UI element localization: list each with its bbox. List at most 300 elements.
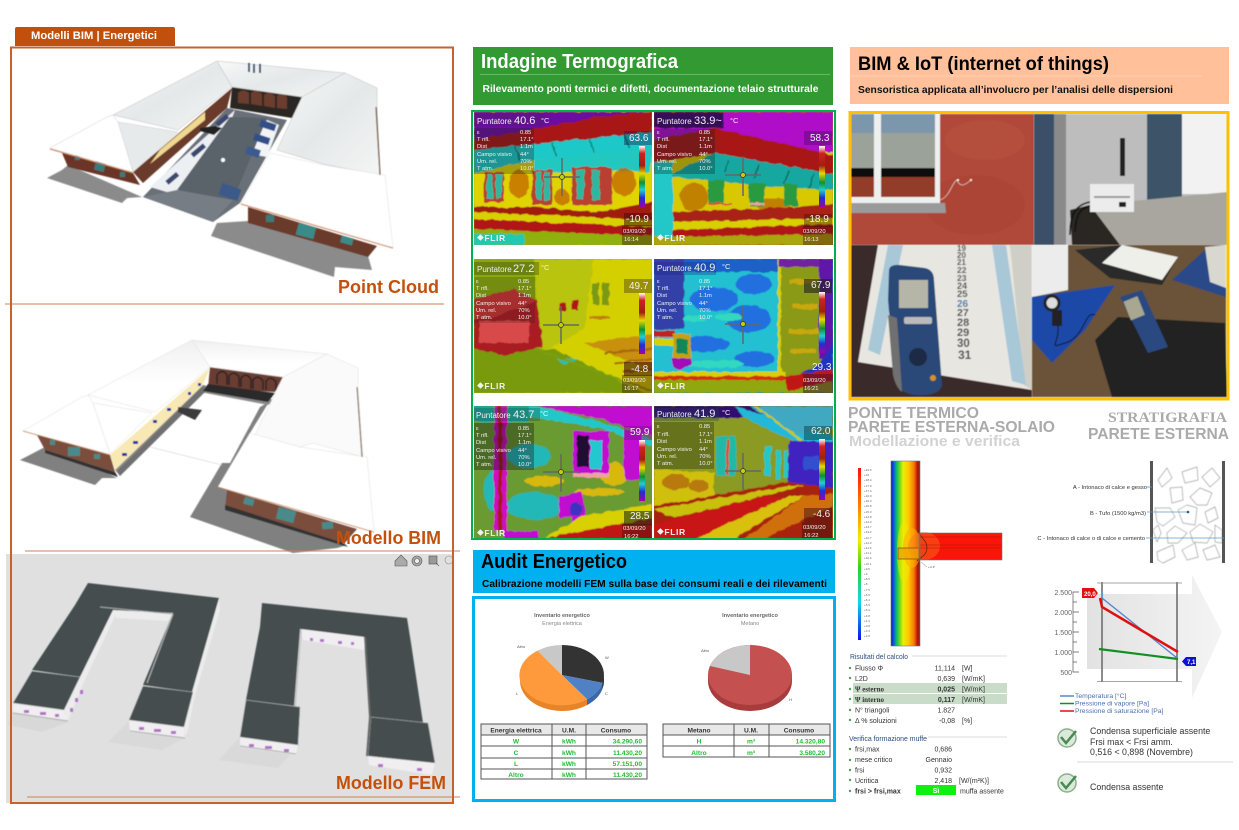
thermal image 5: T rifl. — [476, 433, 489, 439]
thermal image 3: 0.85 — [518, 279, 529, 285]
chart: thermal bridge model: +U.P. — [928, 565, 935, 569]
legend — [1060, 692, 1164, 715]
chart: thermal bridge model: +5.4 — [864, 608, 870, 612]
legend: Pressione di saturazione [Pa] — [1075, 708, 1164, 715]
table: methane: U.M. — [744, 728, 758, 734]
thermal image 1: 0.85 — [520, 130, 531, 136]
thermal image 6: 03/09/20 — [803, 525, 826, 531]
panel: IoT sensor photos — [850, 112, 1228, 399]
thermal image 5: 44° — [518, 448, 527, 454]
chart: thermal bridge model: +18.4 — [864, 478, 872, 482]
chart: thermal bridge model: +16.3 — [864, 499, 872, 503]
thermal image 5: 28.5 — [630, 511, 650, 522]
thermal image 5: ε — [476, 426, 479, 432]
thermal image 4: T rifl. — [657, 286, 670, 292]
thermal image 4: Dist — [657, 293, 667, 299]
thermal image 2: Puntatore — [657, 117, 692, 126]
chart: thermal bridge model: +10.6 — [864, 556, 872, 560]
thermal image 2: 16:13 — [804, 237, 819, 243]
thermal image 5: 59.9 — [630, 427, 650, 438]
thermal image 5: T atm. — [476, 462, 493, 468]
thermal image 6: Campo visivo — [657, 447, 692, 453]
heading: Indagine Termografica: Rilevamento ponti termici e difetti, documentazione telaio strutturale — [482, 83, 819, 95]
photo: meter on calendar: 30 — [957, 338, 970, 350]
chart: thermal bridge model: +14.3 — [864, 520, 872, 524]
photo: sensor on red wall — [851, 114, 1034, 245]
chart: thermal bridge model: +11.1 — [864, 551, 872, 555]
label: Modello BIM: Modello BIM — [336, 528, 441, 548]
panel: calculation results: frsi > frsi,max — [855, 788, 901, 796]
thermal image 3: 10.0° — [518, 315, 532, 321]
heading: Stratigrafia: PARETE ESTERNA — [1088, 426, 1229, 443]
thermal image 4: Campo visivo — [657, 301, 692, 307]
chart: thermal bridge model: +16.9 — [864, 494, 872, 498]
thermal image 6: Puntatore — [657, 410, 692, 419]
thermal image 3: Um. rel. — [476, 308, 497, 314]
thermal image 2: -18.9 — [806, 214, 829, 225]
chart: electricity pie: Energia elettrica — [542, 621, 583, 627]
table: methane: m³ — [747, 738, 756, 746]
table: electricity: 34.290,60 — [613, 738, 642, 746]
heading: Audit Energetico: Calibrazione modelli FEM sulla base dei consumi reali e dei rilevamenti — [482, 578, 827, 590]
chart: thermal bridge model: +13.2 — [864, 530, 872, 534]
panel: calculation results: 0,117 — [938, 697, 955, 704]
thermal image 2: ε — [657, 130, 660, 136]
thermal image 5: Puntatore — [476, 411, 511, 420]
thermal image 6: 70% — [699, 454, 711, 460]
table: electricity: 11.430,20 — [613, 750, 642, 757]
thermal image 1: 40.6 — [514, 115, 535, 127]
thermal image 1: Dist — [477, 144, 487, 150]
chart: methane pie: H — [789, 697, 792, 702]
thermal image 3: 44° — [518, 301, 527, 307]
panel: calculation results: Ψ esterno — [855, 686, 884, 694]
chart: methane pie: Altro — [701, 648, 710, 653]
thermal image 6: Um. rel. — [657, 454, 678, 460]
thermal image 1: T atm. — [477, 166, 494, 172]
marker: 20.0 — [1082, 588, 1098, 598]
thermal image 6: 44° — [699, 447, 708, 453]
chart: thermal bridge model: +4.8 — [864, 614, 870, 618]
table: electricity: 57.151,00 — [613, 761, 642, 768]
marker: 7.1 — [1182, 657, 1196, 666]
table: electricity: kWh — [562, 738, 576, 746]
photo: meter on calendar: 22 — [957, 265, 967, 275]
panel: calculation results: [%] — [962, 718, 972, 725]
chart: methane pie: Metano — [741, 621, 759, 627]
thermal image 3: 17.1° — [518, 286, 532, 292]
thermal image 3: T rifl. — [476, 286, 489, 292]
thermal image 2: Campo visivo — [657, 152, 692, 158]
thermal image 4: ⯁FLIR — [657, 381, 686, 391]
legend: Pressione di vapore [Pa] — [1075, 700, 1149, 708]
chart: thermal bridge model: +9 — [864, 572, 868, 576]
thermal image 2: 10.0° — [699, 166, 713, 172]
heading: Ponte termico — [848, 405, 1055, 450]
arrow: gray background — [1087, 575, 1222, 698]
table: methane: 14.320,80 — [796, 738, 825, 746]
thermal image 5: 10.0° — [518, 462, 532, 468]
panel: calculation results: -0,08 — [939, 718, 955, 725]
thermal image 4: 67.9 — [811, 280, 831, 291]
panel: Modelli BIM frame — [5, 27, 460, 803]
thermal image 2: 0.85 — [699, 130, 710, 136]
chart: condensation verification: 2.500 — [1054, 590, 1072, 597]
table: electricity: Consumo — [601, 728, 631, 734]
table: electricity: W — [513, 738, 520, 746]
panel: calculation results: 0,932 — [934, 768, 952, 774]
thermal image 4: 03/09/20 — [803, 378, 826, 384]
table: electricity — [481, 724, 647, 779]
panel: calculation results: Risultati del calcolo — [850, 654, 908, 661]
thermal image 1 — [474, 112, 652, 245]
model: FEM background — [6, 554, 453, 803]
thermal image 6: 0.85 — [699, 424, 710, 430]
thermal image 2: 17.1° — [699, 137, 713, 143]
heading: Indagine Termografica — [473, 47, 833, 105]
chart: thermal bridge model: +12.7 — [864, 536, 872, 540]
thermal image 1: ε — [477, 130, 480, 136]
heading: Stratigrafia — [1088, 410, 1229, 443]
thermal image 3: 1.1m — [518, 293, 531, 299]
thermal image 6: 16:22 — [804, 533, 819, 539]
heading: Ponte termico: PARETE ESTERNA-SOLAIO — [848, 419, 1055, 436]
chart: thermal bridge model: +3.8 — [864, 624, 870, 628]
text: surface condensation — [1090, 726, 1210, 757]
text: condensation absent: Condensa assente — [1090, 782, 1163, 792]
thermal image 5: 1.1m — [518, 440, 531, 446]
icon: check 2 — [1058, 774, 1076, 792]
table: electricity: kWh — [562, 761, 576, 768]
heading: Ponte termico: Modellazione e verifica — [849, 433, 1021, 450]
text: surface condensation: Frsi max < Frsi amm. — [1090, 737, 1173, 747]
legend: Temperatura [°C] — [1075, 692, 1127, 700]
thermal image 3: Campo visivo — [476, 301, 511, 307]
chart: thermal bridge model: +9.5 — [864, 567, 870, 571]
thermal image 6: T atm. — [657, 461, 674, 467]
table: electricity: Altro — [508, 772, 524, 779]
diagram: wall stratigraphy: B - Tufo (1500 kg/m3) — [1090, 511, 1146, 517]
thermal image 1: 10.0° — [520, 166, 534, 172]
thermal image 2: °C — [730, 116, 739, 125]
heading: Ponte termico: PONTE TERMICO — [848, 405, 979, 422]
table: methane: H — [697, 738, 702, 746]
panel: calculation results: 11,114 — [935, 666, 955, 672]
thermal image 6: ⯁FLIR — [657, 527, 686, 537]
panel: calculation results: Ψ interno — [855, 696, 884, 704]
thermal image 2: T atm. — [657, 166, 674, 172]
panel: calculation results: frsi — [855, 768, 865, 774]
thermal image 6: Dist — [657, 439, 667, 445]
thermal image 5: 0.85 — [518, 426, 529, 432]
panel: calculation results: L2D — [855, 676, 868, 683]
thermal image 2: T rifl. — [657, 137, 670, 143]
thermal image 1: °C — [541, 116, 550, 125]
thermal image 6: 10.0° — [699, 461, 713, 467]
thermal image 3: Puntatore — [477, 265, 512, 274]
thermal image 4: 0.85 — [699, 279, 710, 285]
thermal image 3: °C — [541, 263, 550, 272]
thermal image 5: Um. rel. — [476, 455, 497, 461]
thermal image 1: -10.9 — [626, 214, 649, 225]
thermal image 2: 03/09/20 — [803, 229, 826, 235]
thermal image 4: 44° — [699, 301, 708, 307]
photo: meter on calendar: 24 — [957, 281, 967, 291]
panel: calculation results: [W/mK] — [962, 676, 985, 683]
table: methane: Consumo — [784, 728, 814, 734]
table: methane: Metano — [687, 728, 711, 734]
panel: calculation results: 0,025 — [937, 686, 955, 694]
thermal image 6: 17.1° — [699, 432, 713, 438]
thermal image 3: ε — [476, 279, 479, 285]
thermal image 2: 44° — [699, 152, 708, 158]
thermal image 5: Dist — [476, 440, 486, 446]
panel: calculation results: 1.827 — [937, 708, 955, 714]
thermal image 4: Um. rel. — [657, 308, 678, 314]
chart: thermal bridge model: +8 — [864, 582, 868, 586]
thermal image 1: 44° — [520, 152, 529, 158]
thermal image 1: Um. rel. — [477, 159, 498, 165]
thermal image 6 — [654, 406, 833, 539]
photo: meter on calendar: 26 — [957, 299, 969, 310]
thermal image 4: 1.1m — [699, 293, 712, 299]
chart: thermal bridge model — [858, 461, 1002, 646]
chart: thermal bridge model: +19 — [864, 473, 869, 477]
chart: thermal bridge model: +8.5 — [864, 577, 870, 581]
thermal image 2: ⯁FLIR — [657, 233, 686, 243]
thermal image 5: 16:22 — [624, 534, 639, 540]
panel: calculation results: Flusso Φ — [855, 666, 884, 672]
table: electricity: kWh — [562, 750, 576, 757]
diagram: wall stratigraphy — [1037, 461, 1225, 563]
thermal image 1: T rifl. — [477, 137, 490, 143]
chart: thermal bridge model: +11.6 — [864, 546, 872, 550]
thermal image 5: 70% — [518, 455, 530, 461]
thermal image 1: Puntatore — [477, 117, 512, 126]
photo: meter on calendar — [851, 244, 1032, 397]
chart: electricity pie: Altro — [517, 644, 526, 649]
thermal image 2: Dist — [657, 144, 667, 150]
panel: calculation results: [W] — [962, 666, 973, 672]
diagram: wall stratigraphy: A - Intonaco di calce e gesso — [1073, 485, 1147, 491]
chart: thermal bridge model: +4.3 — [864, 619, 870, 623]
chart: thermal bridge model: +12.2 — [864, 541, 872, 545]
chart: thermal bridge model: +14.8 — [864, 515, 872, 519]
thermal image 3: 16:17 — [624, 386, 639, 392]
chart: thermal bridge model: +17.4 — [864, 489, 872, 493]
photo: meter on calendar: 19 — [957, 244, 966, 253]
diagram: wall stratigraphy: C - Intonaco di calce o di calce e cemento — [1037, 536, 1145, 542]
thermal image 4: Puntatore — [657, 264, 692, 273]
panel: calculation results: [W/mK] — [962, 686, 985, 694]
chart: thermal bridge model: +5.9 — [864, 603, 870, 607]
chart: methane pie: Inventario energetico — [722, 613, 778, 619]
label: Point Cloud: Point Cloud — [338, 277, 439, 297]
thermal image 5 — [474, 406, 652, 540]
photo: meter on calendar: 23 — [957, 273, 967, 283]
panel: calculation results: 0,639 — [937, 676, 955, 683]
panel: energy audit — [474, 598, 834, 800]
panel: calculation results: 0,686 — [934, 746, 952, 754]
thermal image 3: 27.2 — [513, 263, 534, 275]
chart: thermal bridge model: +15.8 — [864, 504, 872, 508]
thermal image 2 — [654, 112, 833, 245]
table: electricity: L — [514, 761, 518, 768]
thermal image 6: -4.6 — [813, 509, 831, 520]
heading: BIM & IoT: Sensoristica applicata all’involucro per l’analisi delle dispersioni — [858, 85, 1173, 96]
icons: FEM viewer toolbar — [395, 555, 453, 566]
chart: thermal bridge model: +2.8 — [864, 634, 870, 638]
panel: calculation results: mese critico — [855, 757, 892, 764]
text: surface condensation: Condensa superficiale assente — [1090, 726, 1210, 736]
table: electricity: kWh — [562, 772, 576, 779]
photo: meter on calendar: 27 — [957, 307, 969, 319]
chart: condensation verification — [1054, 575, 1233, 792]
label: Modello FEM: Modello FEM — [336, 773, 446, 793]
chart: electricity pie: W — [605, 655, 609, 660]
table: methane: m³ — [747, 750, 756, 757]
chart: thermal bridge model: +19.5 — [864, 468, 872, 472]
panel: calculation results: 2,418 — [934, 778, 952, 785]
thermal image 5: °C — [540, 409, 549, 418]
model: Point Cloud — [47, 61, 393, 277]
table: electricity: U.M. — [562, 728, 576, 734]
chart: thermal bridge model: +10.1 — [864, 562, 872, 566]
text: surface condensation: 0,516 < 0,898 (Novembre) — [1090, 747, 1193, 757]
photo: meter on calendar: 31 — [958, 348, 972, 362]
thermal image 4: 29.3 — [812, 362, 832, 373]
panel: calculation results: frsi,max — [855, 746, 880, 754]
chart: methane pie — [701, 613, 792, 711]
thermal image 3: T atm. — [476, 315, 493, 321]
panel: calculation results: N° triangoli — [855, 706, 890, 714]
chart: electricity pie: Inventario energetico — [534, 613, 590, 619]
photo: meter on calendar: 21 — [957, 258, 966, 267]
thermal image 1: 70% — [520, 159, 532, 165]
thermal image 6: 41.9 — [694, 408, 715, 420]
photo: meter on calendar: 25 — [957, 289, 968, 300]
thermal image 1: 63.6 — [629, 133, 649, 144]
thermal image 1: 1.1m — [520, 144, 533, 150]
thermal image 3: 49.7 — [629, 281, 649, 292]
thermal image 3 — [474, 259, 652, 393]
thermal image 2: Um. rel. — [657, 159, 678, 165]
photo: data logger — [1034, 114, 1228, 245]
heading: Stratigrafia: STRATIGRAFIA — [1108, 410, 1227, 426]
thermal image 3: ⯁FLIR — [477, 381, 506, 391]
thermal image 2: 33.9~ — [694, 115, 722, 127]
thermal image 1: 17.1° — [520, 137, 534, 143]
chart: condensation verification: 1.500 — [1054, 630, 1072, 637]
panel: calculation results: [W/(m²K)] — [959, 778, 989, 785]
thermal image 4 — [654, 259, 833, 393]
thermal image 4: T atm. — [657, 315, 674, 321]
panel: calculation results: Gennaio — [926, 757, 952, 764]
chart: electricity pie — [516, 613, 609, 711]
heading: BIM & IoT: BIM & IoT (internet of things) — [858, 54, 1109, 75]
heading: Audit Energetico: Audit Energetico — [481, 551, 627, 573]
panel: calculation results: muffa assente — [960, 788, 1004, 796]
thermal image 4: 70% — [699, 308, 711, 314]
table: electricity: C — [514, 750, 519, 757]
thermal image 4: ε — [657, 279, 660, 285]
panel: calculation results — [849, 654, 1007, 796]
model: Modello FEM — [8, 583, 435, 775]
thermal image 3: 70% — [518, 308, 530, 314]
thermal image 4: 17.1° — [699, 286, 713, 292]
photo: meter on calendar: 28 — [957, 317, 969, 329]
thermal image 5: ⯁FLIR — [477, 528, 506, 538]
panel: calculation results: Δ % soluzioni — [855, 718, 897, 725]
thermal image 5: 43.7 — [513, 409, 534, 421]
thermal image 6: ε — [657, 424, 660, 430]
tab: Modelli BIM | Energetici — [15, 27, 175, 46]
thermal image 5: Campo visivo — [476, 448, 511, 454]
thermal image 2: 1.1m — [699, 144, 712, 150]
chart: electricity pie: C — [605, 691, 608, 696]
thermal image 3: Dist — [476, 293, 486, 299]
heading: Audit Energetico — [473, 550, 835, 593]
thermal image 5: 03/09/20 — [623, 526, 646, 532]
icon: check 1 — [1058, 729, 1076, 747]
thermal image 6: 62.0 — [811, 426, 831, 437]
chart: condensation verification: 2.000 — [1054, 610, 1072, 617]
table: electricity: Energia elettrica — [490, 728, 542, 734]
chart: thermal bridge model: +6.4 — [864, 598, 870, 602]
table: electricity: 11.430,20 — [613, 772, 642, 779]
chart: thermal bridge model: +17.9 — [864, 484, 872, 488]
photo: meters on desk — [1032, 245, 1227, 397]
marker: 7.1: 7,1 — [1187, 660, 1196, 666]
panel: thermal images — [472, 111, 835, 540]
thermal image 2: 70% — [699, 159, 711, 165]
photo: meter on calendar: 29 — [957, 327, 969, 339]
thermal image 4: 10.0° — [699, 315, 713, 321]
chart: thermal bridge model: +7.5 — [864, 588, 870, 592]
thermal image 4: 40.9 — [694, 262, 715, 274]
panel: calculation results: Sì — [933, 788, 939, 795]
chart: condensation verification: 1.000 — [1054, 650, 1072, 657]
thermal image 3: 03/09/20 — [623, 378, 646, 384]
thermal image 6: 1.1m — [699, 439, 712, 445]
thermal image 1: 03/09/20 — [623, 229, 646, 235]
thermal image 4: °C — [722, 262, 731, 271]
table: methane: 3.580,20 — [799, 750, 825, 757]
thermal image 6: °C — [722, 408, 731, 417]
chart: thermal bridge model: +6.9 — [864, 593, 870, 597]
table: methane: Altro — [691, 750, 707, 757]
chart: thermal bridge model: +13.7 — [864, 525, 872, 529]
thermal image 1: ⯁FLIR — [477, 233, 506, 243]
panel: calculation results: [W/mK] — [962, 697, 985, 704]
panel: calculation results: Verifica formazione muffe — [849, 736, 927, 743]
chart: electricity pie: L — [516, 691, 519, 696]
photo: meter on calendar: 20 — [957, 251, 966, 260]
model: Modello BIM — [20, 340, 374, 553]
heading: Indagine Termografica: Indagine Termografica — [481, 51, 679, 73]
chart: condensation verification: 500 — [1060, 670, 1072, 677]
thermal image 2: 58.3 — [810, 133, 830, 144]
thermal image 1: Campo visivo — [477, 152, 512, 158]
thermal image 1: 16:14 — [624, 237, 639, 243]
heading: BIM & IoT — [850, 47, 1229, 104]
chart: thermal bridge model: +3.3 — [864, 629, 870, 633]
thermal image 6: T rifl. — [657, 432, 670, 438]
chart: thermal bridge model: +15.3 — [864, 510, 872, 514]
panel: calculation results: Ucritica — [855, 778, 878, 785]
tab: Modelli BIM | Energetici: Modelli BIM | Energetici — [31, 30, 157, 42]
thermal image 4: 16:21 — [804, 386, 819, 392]
